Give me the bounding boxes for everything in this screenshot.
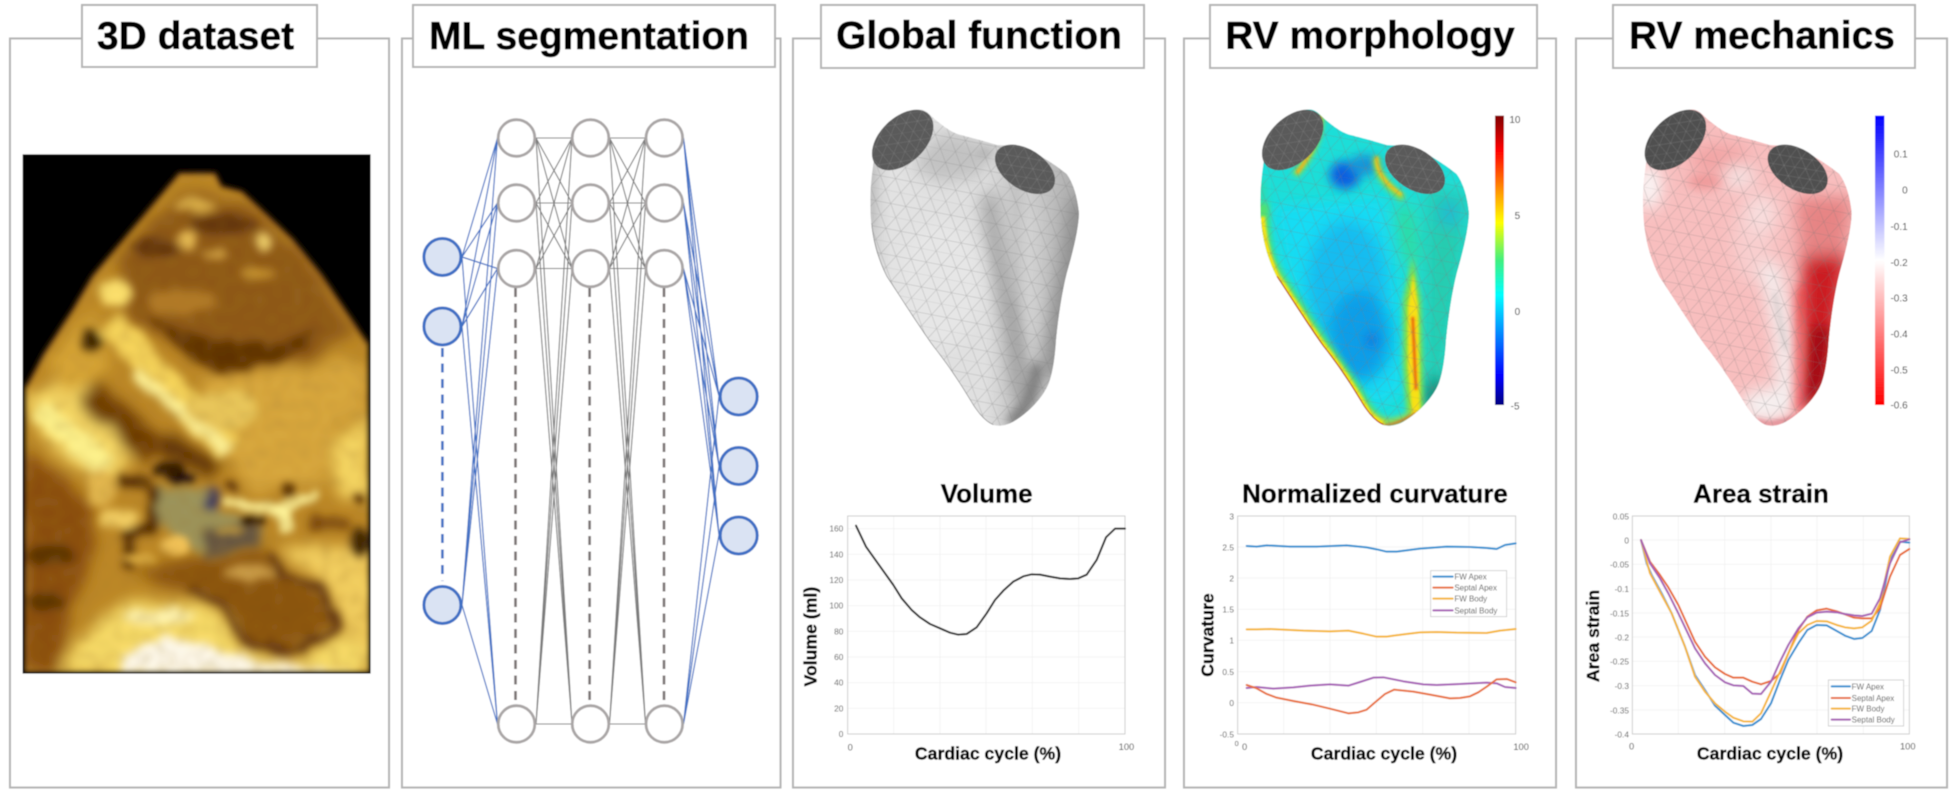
valve: right annulus cap (986, 134, 1064, 204)
y-axis tick labels (1220, 511, 1234, 739)
y-axis tick labels: 100 (829, 601, 844, 611)
y-axis label: Curvature (1197, 593, 1217, 677)
y-axis tick labels: 0 (1229, 698, 1234, 708)
legend (1828, 680, 1904, 726)
3D model: curvature map (1251, 98, 1521, 430)
y-axis tick labels: -0.05 (1610, 560, 1629, 570)
colour bar: strain scale: -0.2 (1890, 258, 1908, 269)
x-axis tick labels: 100 (1513, 742, 1529, 752)
colour bar: strain scale: -0.5 (1890, 365, 1908, 376)
chart title: Normalized curvature (1242, 479, 1508, 509)
y-axis tick labels: 0.5 (1222, 667, 1234, 677)
legend: FW Apex (1454, 573, 1487, 582)
heading: RV mechanics: RV mechanics (1629, 14, 1895, 58)
panel: RV morphology (1184, 5, 1556, 788)
legend: Septal Apex (1852, 694, 1894, 703)
legend: Septal Body (1454, 606, 1497, 615)
curve: FW Body (1641, 538, 1909, 722)
legend: Septal Apex (1454, 584, 1497, 593)
y-axis tick labels: -0.1 (1615, 584, 1629, 594)
y-axis tick labels: 80 (834, 626, 844, 636)
nodes: input layer (424, 238, 461, 624)
y-axis tick labels: -0.35 (1610, 705, 1629, 715)
y-axis tick labels: -0.3 (1615, 681, 1629, 691)
colour bar: strain scale: 0.1 (1894, 150, 1908, 161)
heading: Global function (821, 5, 1144, 68)
heading: RV mechanics (1613, 5, 1915, 68)
y-axis tick labels: -0.2 (1615, 632, 1629, 642)
nodes: output layer (720, 378, 757, 554)
x-axis tick labels: 100 (1119, 742, 1134, 752)
colour bar: strain scale: -0.4 (1890, 329, 1908, 340)
y-axis tick labels: 40 (834, 678, 844, 688)
chart: Normalized curvature (1197, 479, 1529, 763)
chart title: Area strain (1693, 479, 1829, 509)
panel: RV mechanics (1576, 5, 1947, 788)
panel: ML segmentation (402, 5, 780, 788)
colour bar: strain scale: -0.3 (1890, 294, 1908, 305)
y-axis tick labels: 1.5 (1222, 605, 1234, 615)
curve: FW Apex (1247, 543, 1516, 552)
heading: ML segmentation: ML segmentation (429, 15, 749, 58)
colour bar: curvature scale: 10 (1509, 115, 1521, 126)
colour bar: curvature scale: -5 (1511, 402, 1520, 413)
curve: Septal Apex (1247, 679, 1516, 713)
colour bar: curvature scale: 5 (1515, 211, 1521, 222)
x-axis label: Cardiac cycle (%) (1697, 743, 1843, 763)
y-axis tick labels: 60 (834, 652, 844, 662)
nodes: hidden layer 2 (572, 120, 609, 742)
valve: right annulus cap (1759, 134, 1837, 204)
y-axis tick labels: 2 (1229, 573, 1234, 583)
dashed link: input nodes (441, 348, 444, 581)
y-axis tick labels: 120 (829, 575, 844, 585)
legend: FW Body (1454, 595, 1487, 604)
y-axis tick labels: 0.05 (1613, 511, 1629, 521)
3D model: grey RV mesh (870, 109, 1080, 426)
x-axis tick labels: 100 (1900, 741, 1916, 751)
chart: Volume (801, 479, 1134, 763)
legend: Septal Body (1852, 716, 1895, 725)
x-axis tick labels: 0 (1629, 741, 1634, 751)
colour bar: curvature scale (1495, 115, 1521, 413)
y-axis tick labels: -0.25 (1610, 657, 1629, 667)
valve: left annulus cap (1633, 98, 1717, 182)
colour bar: strain scale (1875, 116, 1908, 412)
connections: last hidden layer to output (684, 138, 719, 724)
valve: left annulus cap (1251, 98, 1335, 182)
x-axis tick labels (848, 742, 1134, 752)
y-axis label: Volume (ml) (801, 587, 821, 687)
nodes: hidden layer 3 (646, 120, 683, 742)
y-axis tick labels: -0.5 (1220, 729, 1234, 739)
image: 3D echocardiographic volume (22, 155, 373, 674)
dashed links: hidden layers (516, 288, 664, 705)
legend: FW Body (1852, 705, 1885, 714)
nodes: hidden layer 1 (498, 120, 535, 742)
x-axis tick labels: 0 (1235, 739, 1239, 748)
y-axis tick labels: 0 (1624, 535, 1629, 545)
y-axis tick labels: 2.5 (1222, 542, 1234, 552)
heading: 3D dataset: 3D dataset (97, 15, 294, 58)
y-axis tick labels: 160 (829, 524, 844, 534)
x-axis label: Cardiac cycle (%) (1311, 743, 1457, 763)
heading: RV morphology (1210, 5, 1537, 68)
3D model: area strain map (1633, 98, 1908, 430)
colour bar: curvature scale: 0 (1515, 307, 1521, 318)
y-axis tick labels: 140 (829, 549, 844, 559)
y-axis tick labels: 1 (1229, 636, 1234, 646)
y-axis tick labels: -0.15 (1610, 608, 1629, 618)
curve: Septal Apex (1641, 540, 1909, 684)
colour bar: strain scale: -0.6 (1890, 401, 1908, 412)
y-axis label: Area strain (1583, 590, 1603, 682)
y-axis tick labels: -0.4 (1615, 729, 1629, 739)
diagram: neural network (424, 120, 757, 742)
x-axis tick labels (1629, 741, 1916, 751)
connections: input to first hidden layer (462, 138, 498, 724)
x-axis tick labels: 0 (1242, 742, 1247, 752)
volume curve (856, 526, 1125, 635)
x-axis tick labels: 0 (848, 742, 853, 752)
curve: Septal Body (1247, 677, 1516, 689)
chart: Area strain (1583, 479, 1916, 763)
x-axis tick labels (1235, 739, 1529, 752)
y-axis tick labels (1610, 511, 1629, 739)
panel: Global function (793, 5, 1165, 788)
colour bar: strain scale: 0 (1902, 185, 1908, 196)
curve: FW Apex (1641, 540, 1909, 726)
y-axis tick labels: 0 (839, 729, 844, 739)
heading: Global function: Global function (836, 14, 1122, 58)
heading: RV morphology: RV morphology (1225, 14, 1515, 58)
panel: 3D dataset (10, 5, 389, 788)
y-axis tick labels (829, 524, 844, 739)
valve: left annulus cap (861, 98, 945, 182)
connections: hidden layers (536, 138, 646, 724)
legend: FW Apex (1852, 682, 1884, 691)
y-axis tick labels: 20 (834, 703, 844, 713)
x-axis label: Cardiac cycle (%) (915, 743, 1061, 763)
valve: right annulus cap (1376, 134, 1454, 204)
curve: FW Body (1247, 629, 1516, 637)
legend (1431, 571, 1507, 617)
heading: ML segmentation (413, 5, 775, 67)
chart title: Volume (941, 479, 1033, 509)
curve: Septal Body (1641, 539, 1909, 694)
y-axis tick labels: 3 (1229, 511, 1234, 521)
heading: 3D dataset (82, 5, 317, 67)
colour bar: strain scale: -0.1 (1890, 222, 1908, 233)
